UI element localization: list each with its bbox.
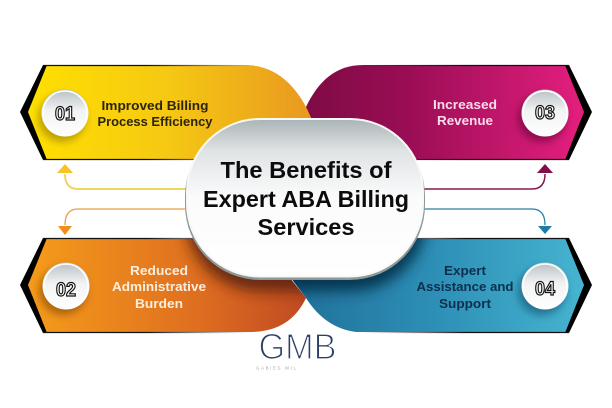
text: expert assistance and support: Expert bbox=[444, 263, 487, 278]
text: reduced administrative burden: Administrative bbox=[112, 279, 206, 294]
text: increased revenue: Increased bbox=[433, 97, 497, 112]
badge: 02: 02 bbox=[56, 280, 76, 301]
badge: 02 bbox=[39, 262, 90, 315]
text: reduced administrative burden: Burden bbox=[135, 296, 183, 311]
arrow: yellow to 01 bbox=[57, 164, 190, 189]
title text bbox=[203, 157, 409, 240]
logo: GMB: GABIES WIL bbox=[256, 366, 296, 370]
badge: 01 bbox=[38, 90, 88, 142]
panel: 02 reduced administrative burden bbox=[20, 238, 306, 334]
text: expert assistance and support bbox=[416, 263, 514, 311]
badge: 03 bbox=[518, 90, 568, 142]
badge: 03: 03 bbox=[535, 103, 555, 124]
panel: 01 improved billing bbox=[20, 65, 312, 160]
title text: Services bbox=[258, 214, 354, 240]
arrow: blue to 04 bbox=[420, 209, 552, 234]
text: reduced administrative burden bbox=[112, 263, 206, 311]
badge: 04: 04 bbox=[535, 279, 555, 300]
text: improved billing process efficiency: Process Efficiency bbox=[98, 114, 213, 129]
text: improved billing process efficiency bbox=[98, 98, 213, 129]
panel: 03 increased revenue bbox=[290, 65, 592, 160]
title text: Expert ABA Billing bbox=[203, 186, 409, 212]
badge: 01: 01 bbox=[55, 104, 75, 125]
arrow: maroon to 03 bbox=[420, 164, 553, 189]
text: improved billing process efficiency: Improved Billing bbox=[102, 98, 209, 113]
title text: The Benefits of bbox=[220, 157, 392, 183]
badge: 04 bbox=[518, 262, 568, 315]
text: increased revenue: Revenue bbox=[437, 113, 493, 128]
logo: GMB: GMB bbox=[258, 326, 336, 367]
arrow: orange to 02 bbox=[58, 209, 190, 235]
text: expert assistance and support: Support bbox=[439, 296, 492, 311]
text: increased revenue bbox=[433, 97, 497, 128]
text: reduced administrative burden: Reduced bbox=[130, 263, 188, 278]
panel: 04 expert assistance bbox=[292, 238, 592, 334]
text: expert assistance and support: Assistance and bbox=[416, 279, 514, 294]
center panel: title bbox=[185, 119, 425, 280]
